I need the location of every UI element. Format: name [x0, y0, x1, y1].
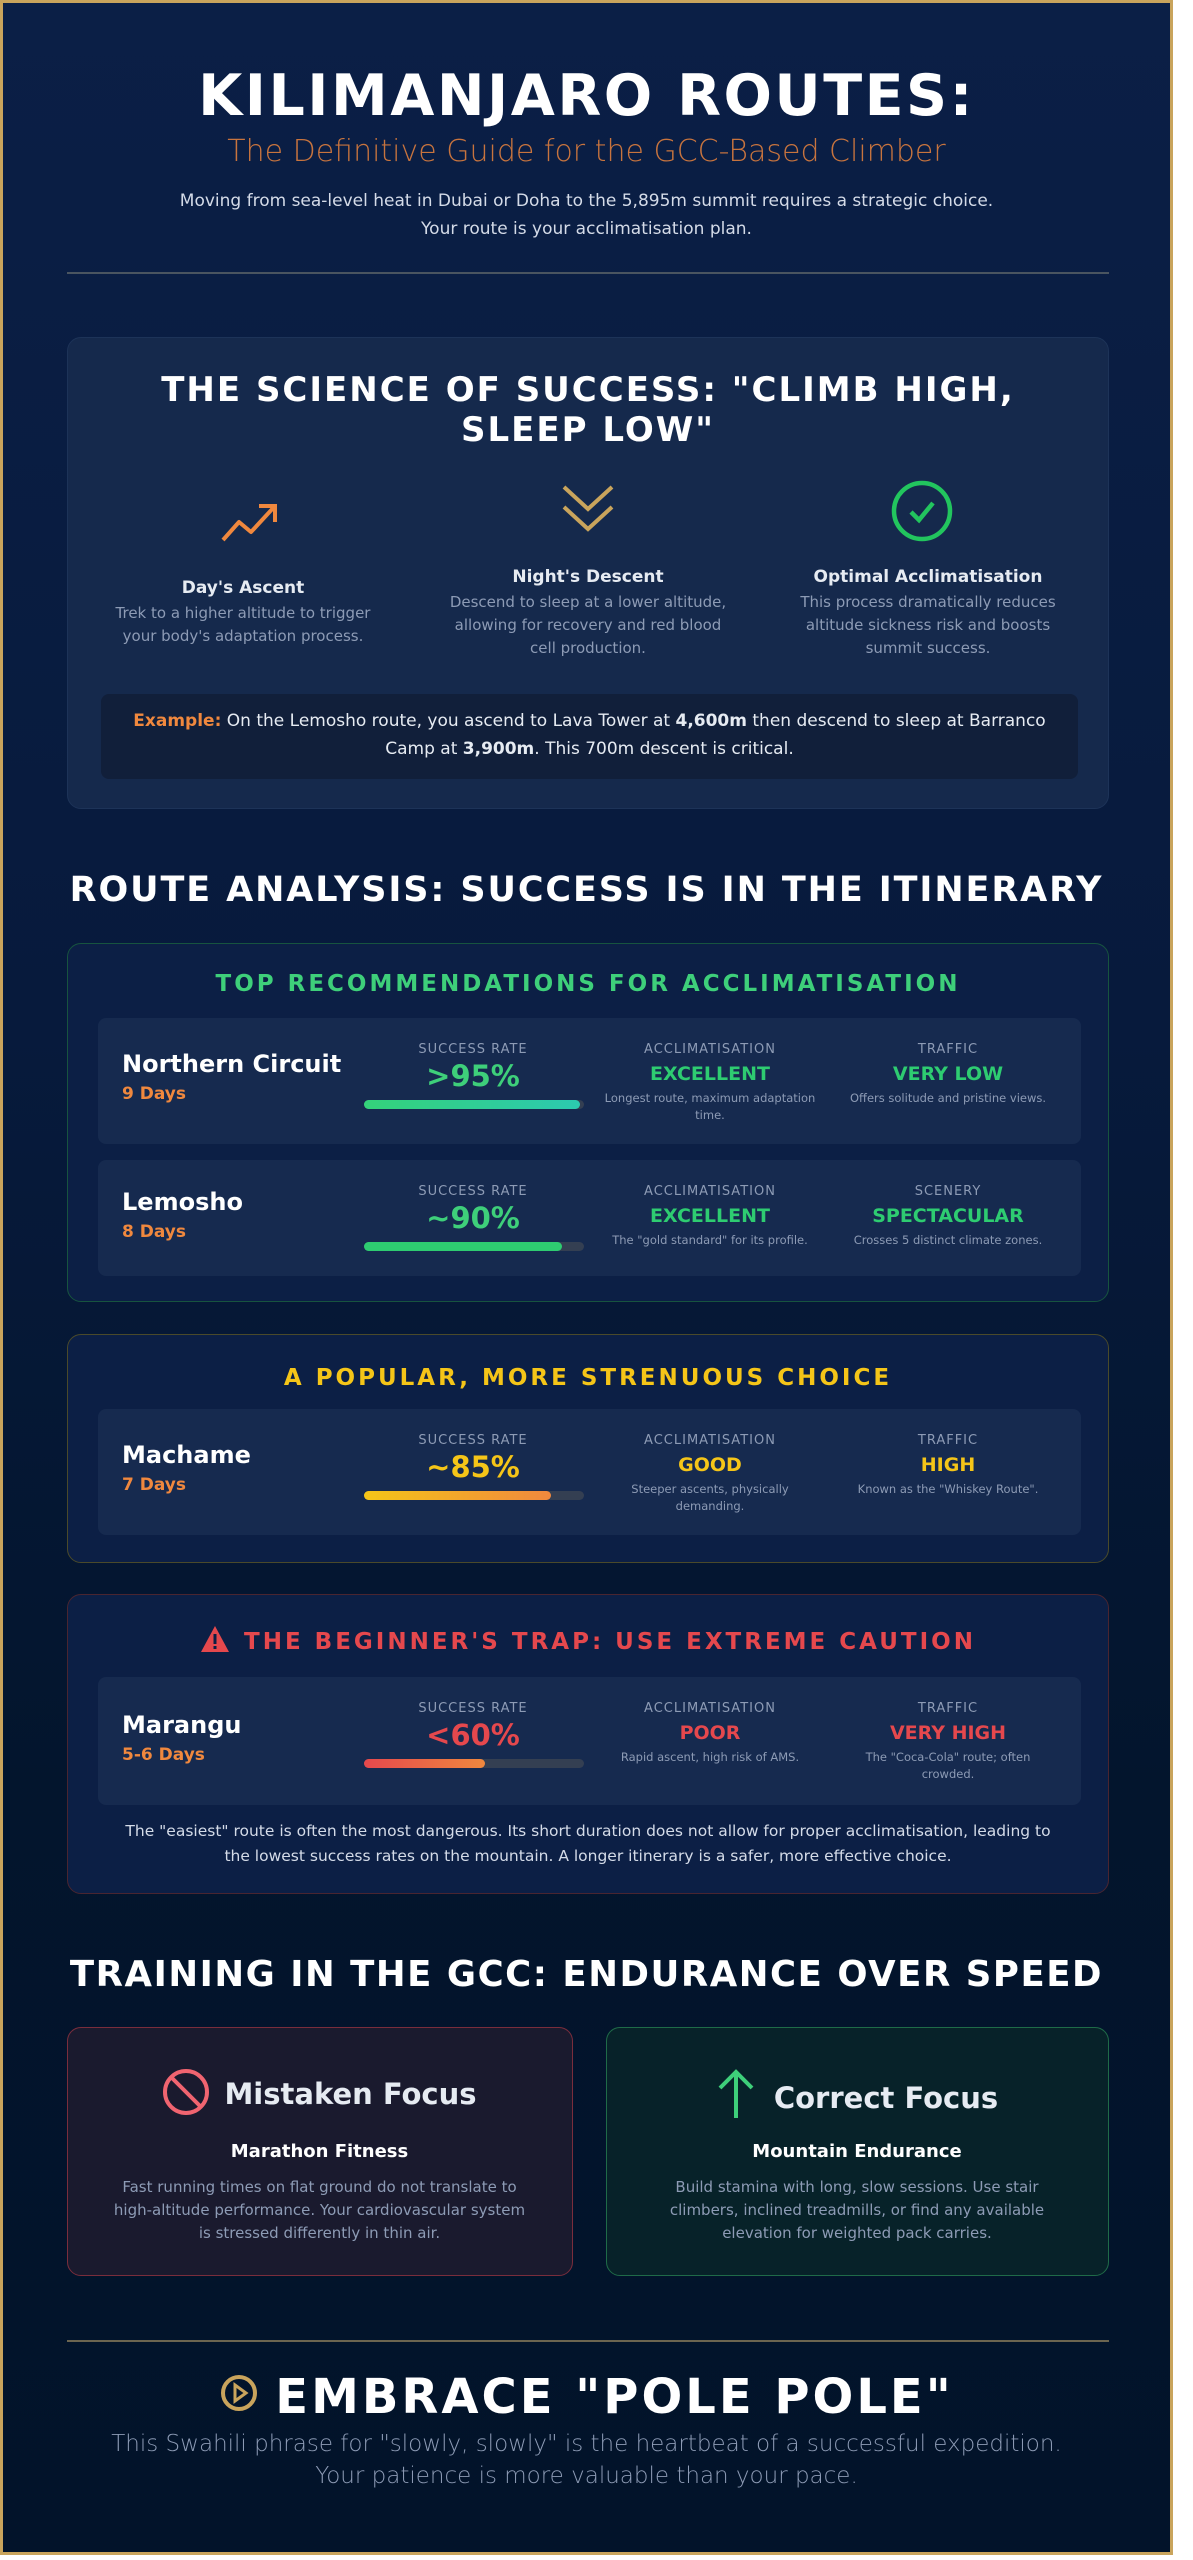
card heading with icon	[163, 2069, 477, 2115]
card: correct focus: Mountain Endurance	[752, 2141, 962, 2162]
row: northern circuit: >95%	[426, 1059, 520, 1093]
row: machame: Steeper ascents, physically	[631, 1482, 789, 1496]
row: marangu: SUCCESS RATE	[418, 1701, 528, 1716]
row: lemosho: 8 Days	[122, 1222, 186, 1242]
card heading with icon	[718, 2069, 998, 2118]
science heading	[161, 370, 1015, 450]
closing text: Your patience is more valuable than your pace.	[315, 2463, 858, 2489]
row: machame: 7 Days	[122, 1475, 186, 1495]
row: lemosho: EXCELLENT	[650, 1205, 770, 1227]
row: marangu: TRAFFIC	[918, 1701, 978, 1716]
callout: example: Example: On the Lemosho route, you ascend to Lava Tower at 4,600m then descend to sleep at Barranco	[133, 711, 1046, 731]
panel: beginner's trap	[67, 1594, 1109, 1894]
step: night's descent: allowing for recovery and red blood	[455, 616, 721, 634]
row: northern circuit: VERY LOW	[893, 1063, 1003, 1085]
row: northern circuit: Offers solitude and pristine views.	[850, 1091, 1046, 1105]
warning text	[125, 1822, 1051, 1865]
row: marangu: VERY HIGH	[890, 1722, 1006, 1744]
row: marangu: Marangu	[122, 1711, 241, 1739]
science heading: THE SCIENCE OF SUCCESS: "CLIMB HIGH,	[161, 370, 1015, 410]
icon: check	[892, 480, 952, 542]
card heading with icon: Mistaken Focus	[224, 2077, 477, 2111]
step: optimal acclimatisation: summit success.	[866, 639, 990, 657]
step: day's ascent: your body's adaptation process.	[123, 627, 363, 645]
intro text: Your route is your acclimatisation plan.	[421, 219, 752, 239]
subtitle: The Definitive Guide for the GCC-Based Climber	[227, 134, 946, 169]
row: lemosho	[98, 1160, 1081, 1276]
card: mistaken focus: Fast running times on flat ground do not translate to	[122, 2178, 517, 2196]
step: night's descent	[450, 567, 726, 657]
step: optimal acclimatisation: altitude sickness risk and boosts	[806, 616, 1050, 634]
card: correct focus: elevation for weighted pack carries.	[722, 2224, 992, 2242]
row: northern circuit: TRAFFIC	[918, 1042, 978, 1057]
row: marangu: Rapid ascent, high risk of AMS.	[621, 1750, 799, 1764]
warning text: the lowest success rates on the mountain. A longer itinerary is a safer, more effective choice.	[224, 1847, 952, 1865]
row: machame: GOOD	[678, 1454, 742, 1476]
row: marangu: <60%	[426, 1718, 520, 1752]
row: marangu: ACCLIMATISATION	[644, 1701, 776, 1716]
panel: popular strenuous	[67, 1334, 1109, 1563]
row: machame: Known as the "Whiskey Route".	[858, 1482, 1038, 1496]
row: marangu: 5-6 Days	[122, 1745, 205, 1765]
intro text: Moving from sea-level heat in Dubai or Doha to the 5,895m summit requires a strategic choice.	[180, 191, 993, 211]
row: northern circuit: ACCLIMATISATION	[644, 1042, 776, 1057]
row: northern circuit: SUCCESS RATE	[418, 1042, 528, 1057]
row: lemosho: Lemosho	[122, 1188, 243, 1216]
card: correct focus	[606, 2027, 1109, 2276]
panel heading: TOP RECOMMENDATIONS FOR ACCLIMATISATION	[216, 971, 960, 997]
row: northern circuit: Northern Circuit	[122, 1050, 341, 1078]
icon: descent	[562, 486, 614, 532]
step: optimal acclimatisation: Optimal Acclimatisation	[814, 567, 1042, 587]
row: northern circuit: Longest route, maximum adaptation	[605, 1091, 815, 1105]
card: mistaken focus	[67, 2027, 573, 2276]
step: night's descent: Descend to sleep at a lower altitude,	[450, 593, 726, 611]
panel: science of success	[67, 337, 1109, 809]
row: marangu	[98, 1677, 1081, 1805]
step: optimal acclimatisation	[800, 567, 1056, 657]
heading: embrace pole pole: EMBRACE "POLE POLE"	[275, 2369, 954, 2425]
callout: example: Camp at 3,900m. This 700m descent is critical.	[385, 739, 794, 759]
row: machame: ~85%	[426, 1450, 520, 1484]
row: lemosho: The "gold standard" for its profile.	[612, 1233, 808, 1247]
row: lemosho: SUCCESS RATE	[418, 1184, 528, 1199]
intro text	[180, 191, 993, 239]
card: correct focus: Build stamina with long, slow sessions. Use stair	[675, 2178, 1039, 2196]
panel: top recommendations	[67, 943, 1109, 1302]
heading: route analysis: ROUTE ANALYSIS: SUCCESS IS IN THE ITINERARY	[70, 870, 1103, 910]
row: northern circuit: 9 Days	[122, 1084, 186, 1104]
step: day's ascent	[115, 578, 370, 645]
closing text	[111, 2431, 1062, 2489]
heading: training: TRAINING IN THE GCC: ENDURANCE OVER SPEED	[70, 1954, 1103, 1995]
row: machame: HIGH	[921, 1454, 975, 1476]
row: lemosho: SPECTACULAR	[872, 1205, 1024, 1227]
closing text: This Swahili phrase for "slowly, slowly" is the heartbeat of a successful expedition.	[111, 2431, 1062, 2457]
row: machame: ACCLIMATISATION	[644, 1433, 776, 1448]
row: lemosho: Crosses 5 distinct climate zones.	[854, 1233, 1042, 1247]
row: lemosho: SCENERY	[915, 1184, 981, 1199]
row: northern circuit: EXCELLENT	[650, 1063, 770, 1085]
panel heading with warning icon: THE BEGINNER'S TRAP: USE EXTREME CAUTION	[244, 1629, 976, 1655]
panel heading: A POPULAR, MORE STRENUOUS CHOICE	[284, 1365, 892, 1391]
row: northern circuit: time.	[695, 1108, 725, 1122]
step: day's ascent: Day's Ascent	[182, 578, 304, 598]
row: machame: TRAFFIC	[918, 1433, 978, 1448]
warning text: The "easiest" route is often the most dangerous. Its short duration does not allow for proper acclimatisation, leading to	[125, 1822, 1051, 1840]
step: optimal acclimatisation: This process dramatically reduces	[800, 593, 1056, 611]
card: mistaken focus: high-altitude performance. Your cardiovascular system	[114, 2201, 525, 2219]
row: lemosho: ~90%	[426, 1201, 520, 1235]
row: marangu: The "Coca-Cola" route; often	[866, 1750, 1030, 1764]
card: mistaken focus: is stressed differently in thin air.	[199, 2224, 440, 2242]
row: lemosho: ACCLIMATISATION	[644, 1184, 776, 1199]
row: machame: SUCCESS RATE	[418, 1433, 528, 1448]
card heading with icon: Correct Focus	[774, 2081, 998, 2115]
step: night's descent: Night's Descent	[512, 567, 664, 587]
callout: example	[101, 694, 1078, 779]
science heading: SLEEP LOW"	[461, 410, 715, 450]
step: night's descent: cell production.	[530, 639, 646, 657]
row: northern circuit	[98, 1018, 1081, 1144]
row: marangu: POOR	[680, 1722, 740, 1744]
step: day's ascent: Trek to a higher altitude to trigger	[116, 604, 370, 622]
row: marangu: crowded.	[922, 1767, 974, 1781]
title: KILIMANJARO ROUTES:	[198, 63, 975, 129]
row: machame: demanding.	[676, 1499, 744, 1513]
card: mistaken focus: Marathon Fitness	[231, 2141, 408, 2162]
card: correct focus: climbers, inclined treadmills, or find any available	[670, 2201, 1044, 2219]
icon: ascent	[222, 504, 277, 542]
row: machame: Machame	[122, 1441, 251, 1469]
row: machame	[98, 1409, 1081, 1535]
